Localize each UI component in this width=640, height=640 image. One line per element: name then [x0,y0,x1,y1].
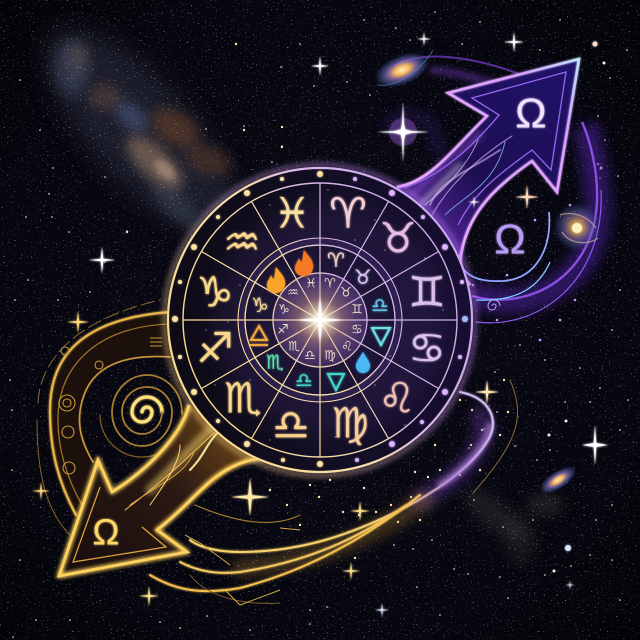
zodiac wheel [165,165,475,475]
inner ring signs: ♎︎ [304,348,316,364]
outer ring zodiac signs: ♊︎ [408,268,446,316]
outer ring zodiac signs: ♌︎ [378,374,416,422]
inner ring signs: ♋︎ [351,322,363,338]
inner ring signs: ♍︎ [324,348,336,364]
outer ring zodiac signs: ♐︎ [196,324,234,372]
leo sign in golden arrowhead: Ω [93,512,119,552]
violet arrow inner outline [405,72,566,225]
golden arrow inner outline [73,487,166,562]
colored middle band wedge tint [258,258,382,382]
wheel specks [206,190,443,440]
outer ring zodiac signs [196,188,446,450]
galaxy: small lower right [535,461,581,499]
outer ring zodiac signs: ♒︎ [223,218,261,266]
leo sign in arrowhead: Ω [515,90,547,136]
golden arrow outline [59,405,270,576]
small spiral [488,300,500,310]
wheel spokes [183,183,457,457]
galaxy: upper violet [369,45,435,95]
central starburst [270,270,370,370]
constellation marks [185,528,300,605]
middle ring elements and signs: ♏︎ [266,350,284,374]
golden loop outlines [37,300,172,535]
middle ring elements and signs [250,248,390,392]
golden to violet comet trail [150,380,518,603]
inner ring signs: ♊︎ [351,302,363,318]
inner galaxy tint [215,205,445,435]
leo sign in swirl: Ω [494,216,526,262]
outer ring zodiac signs: ♉︎ [379,214,417,262]
wheel beads [172,171,468,467]
inner ring signs: ♐︎ [277,322,289,338]
inner ring signs: ♏︎ [288,340,300,354]
water drop [356,352,370,373]
golden arrow body [59,405,262,576]
wheel halo [165,165,475,475]
golden shaft streaks [125,425,220,510]
outer ring zodiac signs: ♎︎ [272,400,310,450]
arrow: violet ascending arrow with swirl [370,57,601,323]
inner ring signs: ♌︎ [341,340,353,354]
middle ring elements and signs: ♎︎ [371,293,389,317]
outer ring zodiac signs: ♑︎ [196,268,234,316]
middle ring elements and signs: ♈︎ [327,248,345,272]
inner ring signs [277,276,363,364]
violet arrow body [370,59,579,300]
golden loop band [50,312,170,522]
violet halo star [377,102,429,162]
fire icons [267,250,313,293]
golden spiral [100,375,182,457]
galaxy: spiral right [553,203,601,251]
middle ring elements and signs: ♉︎ [354,265,372,289]
wheel rings [168,168,472,472]
outer ring zodiac signs: ♓︎ [273,188,311,238]
arrow: golden descending arrow with spiral [37,300,518,605]
outer ring zodiac signs: ♋︎ [408,324,446,372]
milky way nebula [16,0,563,566]
violet arrow outline [397,59,579,285]
teal triangle [328,374,344,390]
triangle [250,326,268,345]
violet shaft streaks [412,135,512,215]
inner ring signs: ♓︎ [305,276,317,292]
outer ring zodiac signs: ♍︎ [331,398,369,448]
violet swirl halo [385,57,601,323]
inner ring signs: ♑︎ [278,302,290,318]
outer ring zodiac signs: ♏︎ [224,374,262,422]
middle ring elements and signs: ♑︎ [251,293,269,317]
inner ring signs: ♒︎ [287,286,299,300]
wheel disc [167,167,473,473]
middle ring elements and signs: ♎︎ [295,368,313,392]
inner ring signs: ♉︎ [340,286,352,300]
outer ring zodiac signs: ♈︎ [329,188,367,238]
inner ring signs: ♈︎ [324,276,336,292]
golden loop small glyphs [59,338,162,474]
